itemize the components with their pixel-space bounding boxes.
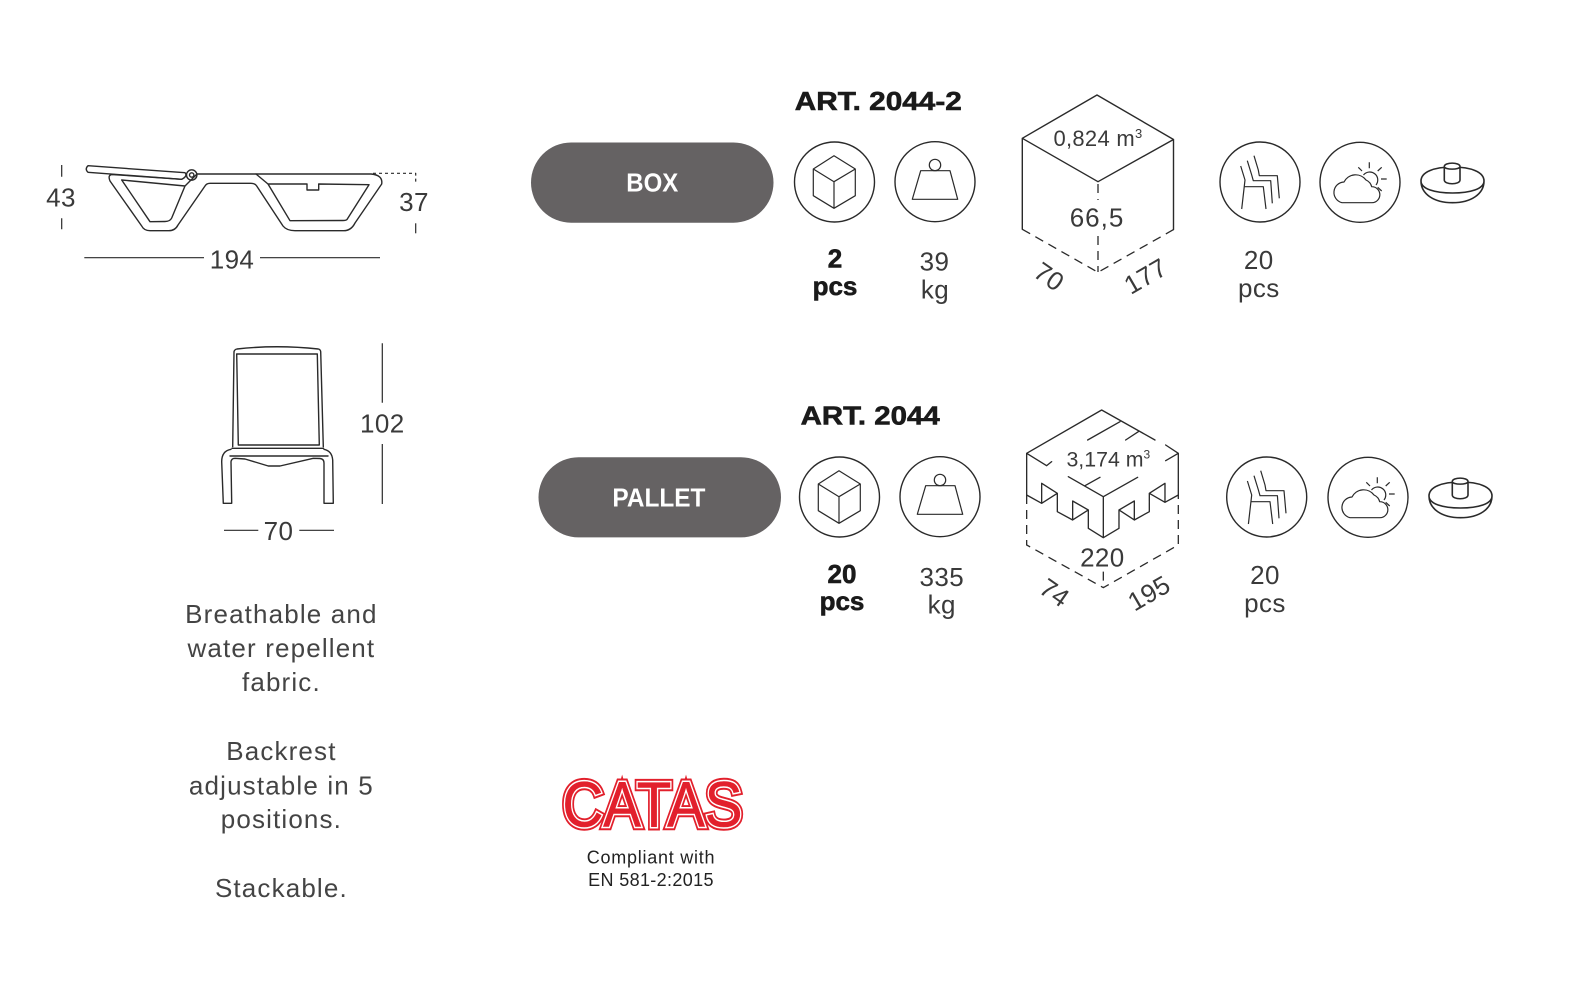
icon: cube with quantity [794,142,874,301]
certification note: EN 581-2:2015 [588,870,714,890]
features text: Backrest [226,736,337,766]
icon: outdoor weather [1328,457,1408,537]
box volume diagram: 66,5 [1070,203,1124,233]
icon: stackable chairs with quantity [1220,142,1300,303]
icon: weight with value: 335 [920,562,964,592]
pill: BOX: BOX [626,168,679,198]
icon: weight with value: kg [928,590,956,620]
CATAS logo: CATAS [562,768,742,840]
certification note [587,847,715,890]
row: box packaging [531,86,1484,304]
CATAS logo: CATAS [562,768,742,840]
lounger front profile [222,347,333,503]
lounger side profile [86,166,382,231]
pallet volume diagram [1027,410,1178,617]
icon: cube with quantity: 2 [828,244,842,274]
features text: positions. [221,804,342,834]
dimension: 43 [46,165,76,229]
dimension: 102: 102 [360,409,405,439]
pill: BOX [531,142,774,223]
box volume diagram: 70 [1028,256,1070,297]
box volume diagram: 177 [1119,252,1172,300]
side view drawing with dimensions [46,165,429,274]
icon: stackable chairs with quantity: pcs [1238,273,1280,303]
dimension: 43: 43 [46,183,76,213]
icon: outdoor weather [1320,142,1400,222]
icon: disc foot [1421,163,1484,203]
icon: disc foot [1429,478,1492,518]
dimension: 70: 70 [264,516,293,546]
features text: fabric. [242,667,321,697]
pallet volume diagram: 195 [1123,569,1175,617]
icon: cube with quantity: 20 [828,559,856,589]
icon: stackable chairs with quantity: 20 [1250,560,1280,590]
icon: weight with value: kg [921,274,949,304]
box volume diagram: 3 [1135,126,1143,141]
features text: adjustable in 5 [189,770,374,800]
certification note: Compliant with [587,847,715,867]
icon: stackable chairs with quantity: pcs [1244,588,1286,618]
icon: stackable chairs with quantity [1227,457,1307,618]
box volume diagram: 0,824 m [1053,126,1135,151]
icon: stackable chairs with quantity: 20 [1244,245,1274,275]
dimension: 70 [224,516,334,546]
heading: ART. 2044: ART. 2044 [801,401,940,431]
pallet volume diagram: 74 [1034,572,1075,613]
pallet volume diagram: 3,174 m [1066,448,1144,472]
pallet volume diagram: 3 [1144,448,1151,462]
icon: weight with value [895,142,975,304]
icon: cube with quantity: pcs [820,586,864,616]
dimension: 194: 194 [210,244,254,274]
dimension: 37: 37 [399,187,429,217]
row: pallet packaging [538,401,1492,620]
icon: cube with quantity [800,457,880,616]
dimension: 37 [373,173,429,233]
icon: weight with value [900,457,980,620]
pallet volume diagram: 220 [1080,543,1125,573]
icon: cube with quantity: pcs [813,271,857,301]
pill: PALLET: PALLET [612,482,705,512]
features text [185,599,378,903]
heading: ART. 2044-2: ART. 2044-2 [795,86,962,116]
pill: PALLET [538,457,781,537]
features text: Breathable and [185,599,378,629]
front view drawing with dimensions [222,343,405,546]
box volume diagram [1022,95,1174,300]
features text: water repellent [187,633,375,663]
CATAS logo: CATAS [562,768,742,840]
features text: Stackable. [215,873,348,903]
icon: weight with value: 39 [920,247,949,277]
